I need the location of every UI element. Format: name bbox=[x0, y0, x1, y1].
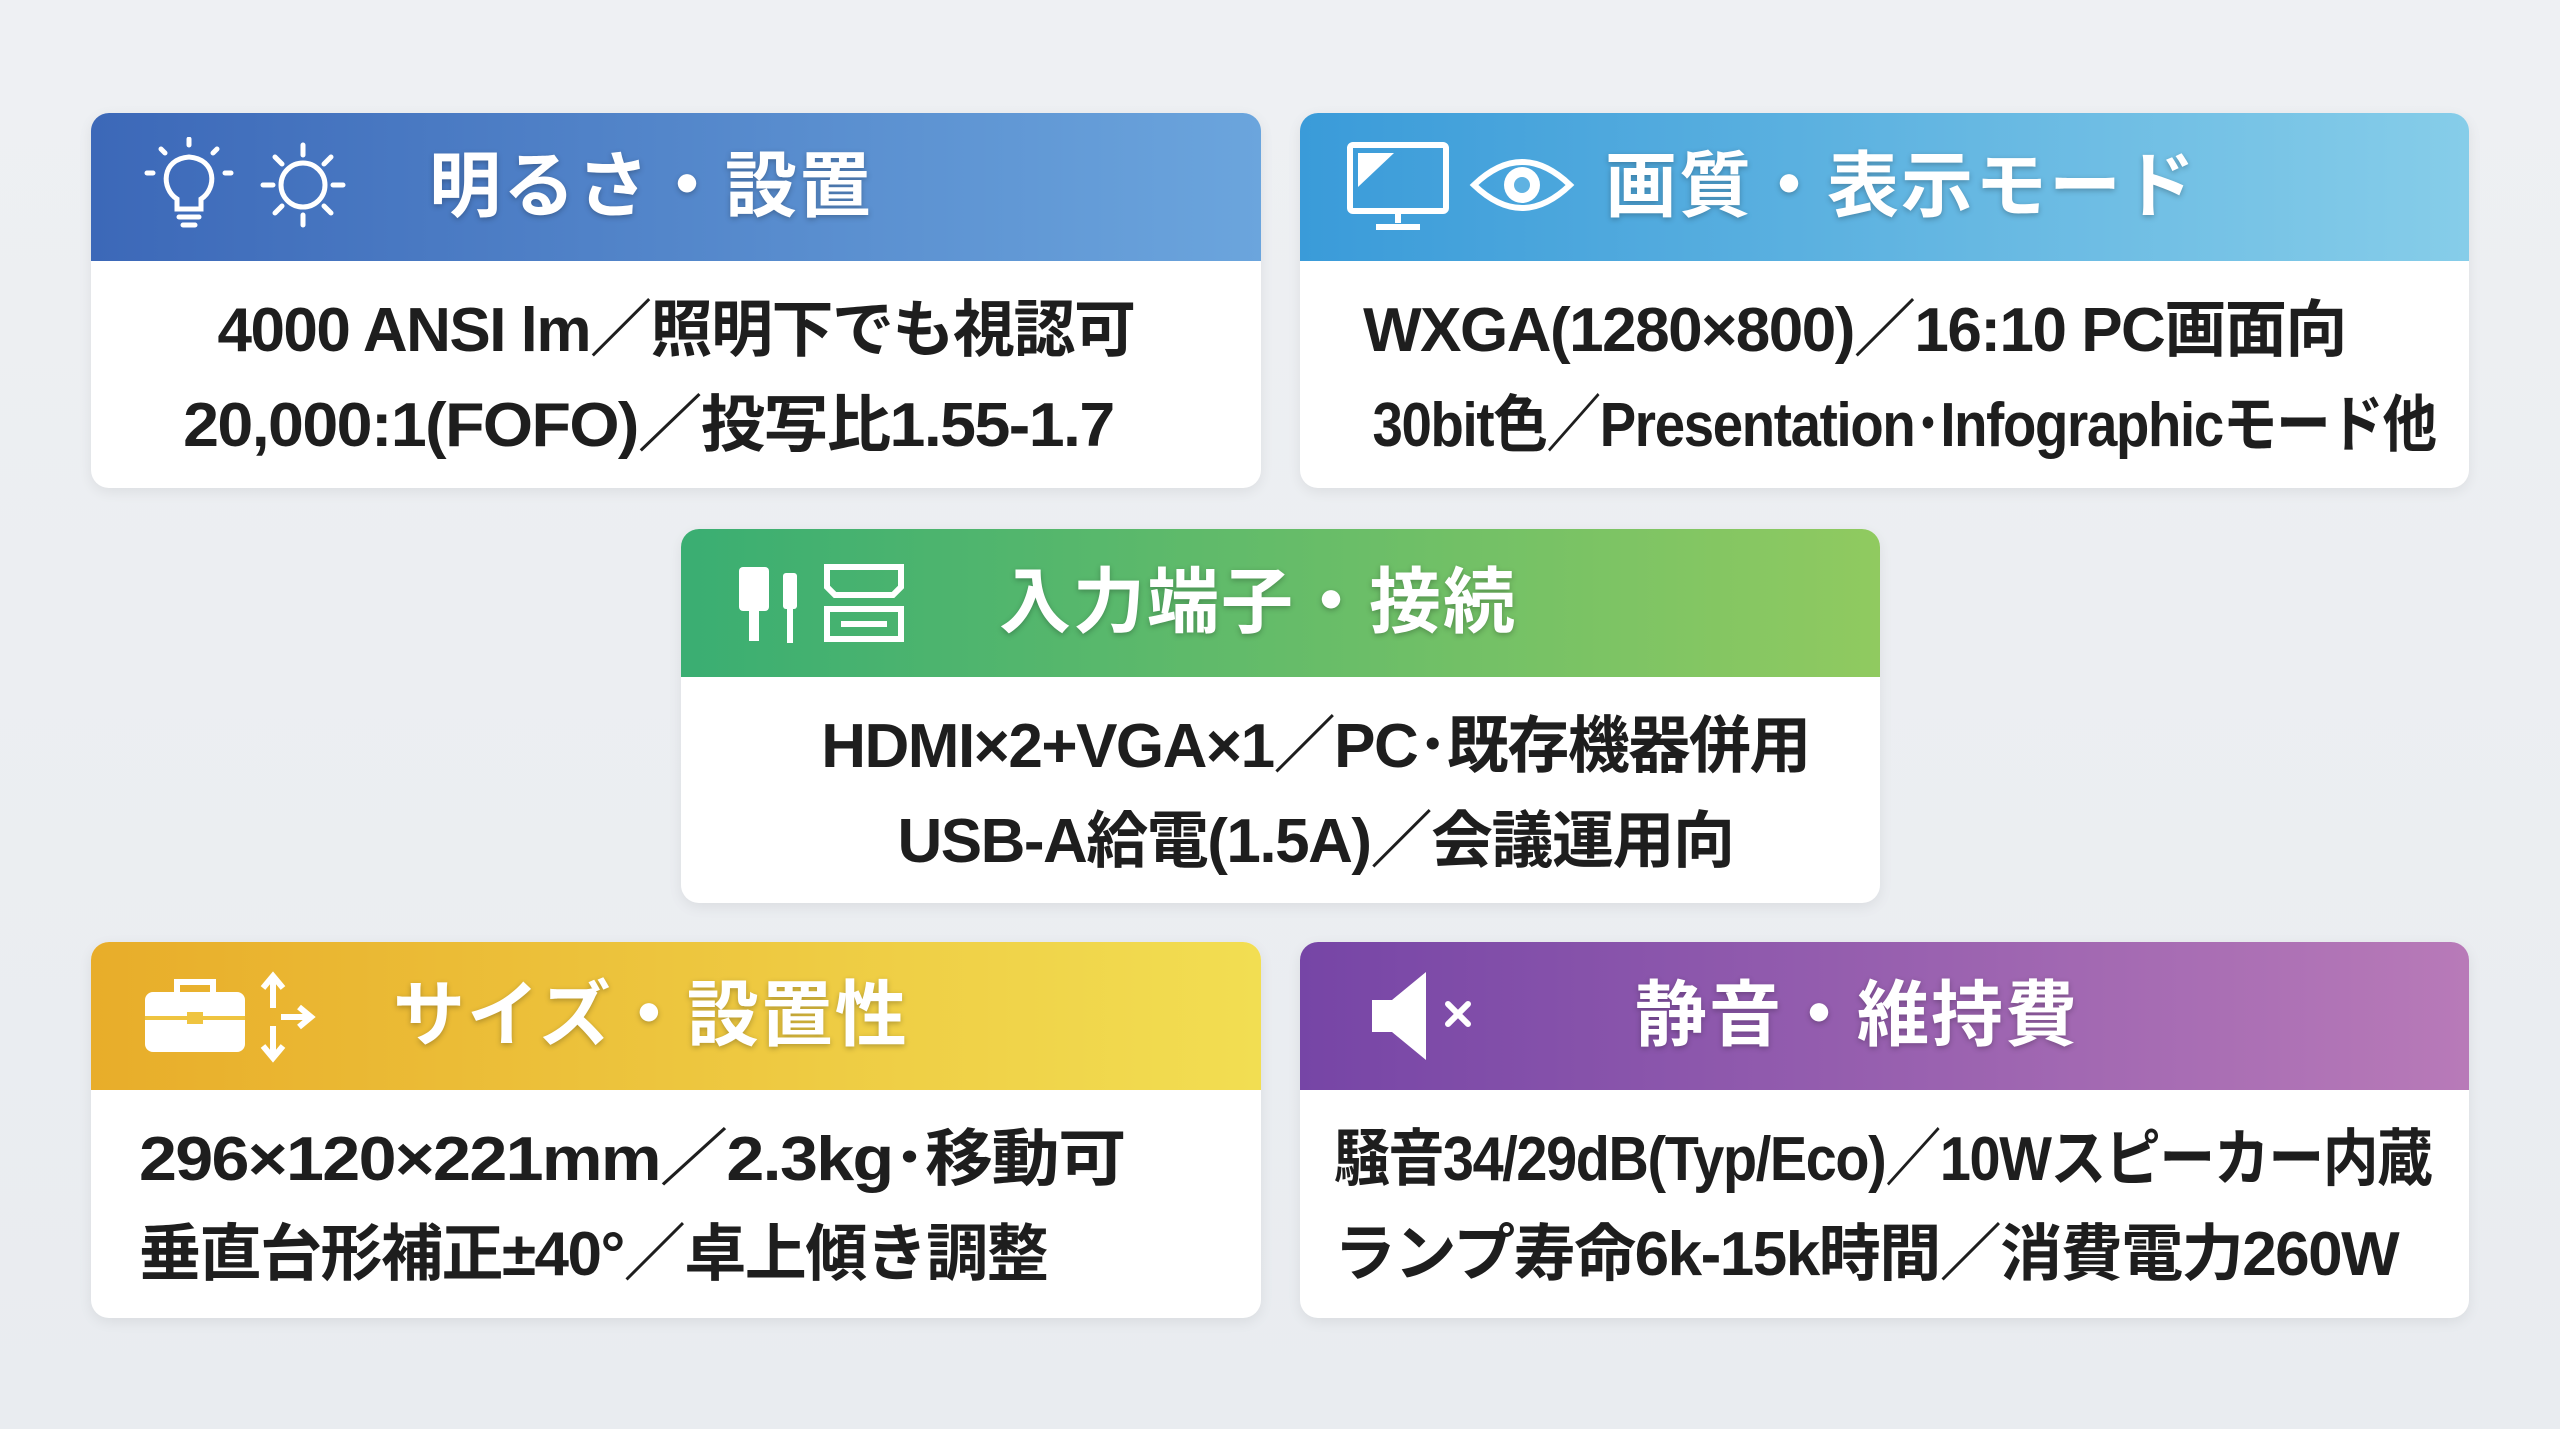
header: noise bbox=[1300, 942, 2469, 1090]
header: inputs bbox=[681, 529, 1880, 677]
icons: bulb and sun bbox=[144, 137, 346, 228]
text: input specs: HDMI×2+VGA×1／PC･既存機器併用 bbox=[821, 712, 1810, 781]
panel: noise bbox=[1300, 942, 2469, 1318]
heading: image quality: 画質・表示モード bbox=[1605, 147, 2197, 227]
text: image quality specs: WXGA(1280×800)／16:10 PC画面向 bbox=[1363, 296, 2346, 365]
panel: inputs bbox=[681, 529, 1880, 903]
header: image quality bbox=[1300, 113, 2469, 261]
heading: size: サイズ・設置性 bbox=[393, 976, 909, 1056]
text: input specs bbox=[821, 712, 1810, 876]
heading: brightness: 明るさ・設置 bbox=[429, 147, 873, 227]
panel: image quality bbox=[1300, 113, 2469, 488]
header: brightness bbox=[91, 113, 1261, 261]
text: size specs: 296×120×221mm／2.3kg･移動可 bbox=[139, 1125, 1125, 1194]
icons: briefcase and arrows bbox=[145, 972, 316, 1062]
text: image quality specs: 30bit色／Presentation･Infographicモード他 bbox=[1372, 391, 2436, 460]
text: noise specs: ランプ寿命6k-15k時間／消費電力260W bbox=[1334, 1220, 2398, 1289]
panel: brightness bbox=[91, 113, 1261, 488]
text: brightness specs bbox=[183, 296, 1135, 460]
text: noise specs bbox=[1334, 1125, 2432, 1289]
heading: inputs: 入力端子・接続 bbox=[999, 563, 1517, 643]
icon: muted speaker bbox=[1372, 972, 1471, 1060]
icons: monitor and eye bbox=[1347, 142, 1574, 230]
header: size bbox=[91, 942, 1261, 1090]
panel: size bbox=[91, 942, 1261, 1318]
text: input specs: USB-A給電(1.5A)／会議運用向 bbox=[897, 807, 1734, 876]
heading: noise: 静音・維持費 bbox=[1635, 976, 2079, 1056]
text: size specs bbox=[139, 1125, 1125, 1289]
text: image quality specs bbox=[1363, 296, 2436, 460]
text: brightness specs: 20,000:1(FOFO)／投写比1.55-1.7 bbox=[183, 391, 1113, 460]
text: noise specs: 騒音34/29dB(Typ/Eco)／10Wスピーカー内蔵 bbox=[1334, 1125, 2432, 1194]
text: size specs: 垂直台形補正±40°／卓上傾き調整 bbox=[139, 1220, 1047, 1289]
icons: usb and hdmi bbox=[739, 564, 904, 643]
text: brightness specs: 4000 ANSI lm／照明下でも視認可 bbox=[217, 296, 1135, 365]
